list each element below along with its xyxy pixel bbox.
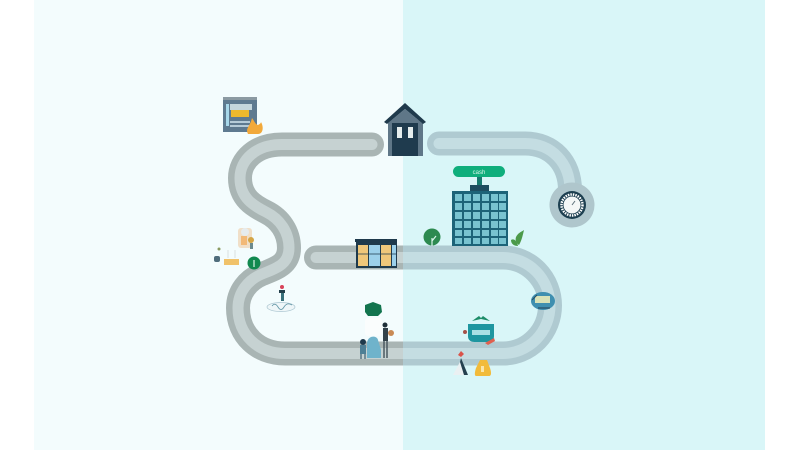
- icon: document panel with flame: [223, 97, 263, 134]
- icon: group of people: [360, 318, 394, 359]
- icon: clock dial: [550, 182, 594, 228]
- icon: person with tent: [453, 351, 468, 375]
- icon: sign on tower building: [452, 166, 508, 246]
- sign label: cash: [473, 170, 485, 176]
- road segment: top right to dial: [439, 144, 570, 190]
- panel: right background: [403, 0, 765, 450]
- icon: plant: [511, 230, 524, 246]
- winding road: right half: [403, 246, 562, 366]
- icon: water fountain and cloud: [267, 285, 295, 312]
- icon: round tree: [424, 228, 440, 246]
- icon: workers and materials: [214, 228, 254, 265]
- icon: coastal map badge: [531, 292, 555, 310]
- icon: green tree canopy: [365, 302, 382, 316]
- icon: shop front: [355, 239, 397, 268]
- panel: left background: [34, 0, 403, 450]
- icon: green location badge: [248, 256, 260, 270]
- icon: yellow bag: [475, 360, 491, 376]
- icon: house: [384, 103, 426, 156]
- winding road: left half: [226, 132, 403, 366]
- icon: shield badge: [463, 316, 495, 345]
